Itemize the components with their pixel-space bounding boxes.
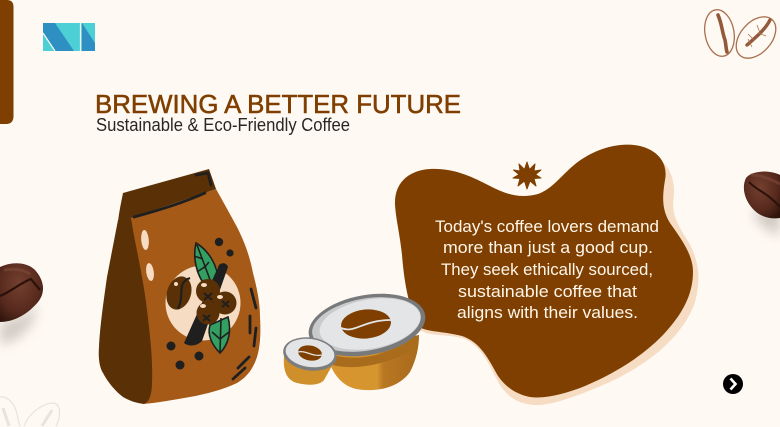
illustration: large coffee capsule bbox=[304, 285, 430, 390]
icon: next arrow button bbox=[723, 374, 743, 394]
icon: sketched coffee beans bbox=[701, 7, 780, 66]
leaves bbox=[194, 243, 230, 353]
bag dots bbox=[166, 238, 234, 370]
icon: coffee bean right bbox=[744, 172, 780, 236]
bag front bbox=[131, 189, 260, 404]
speech blob bbox=[395, 145, 693, 397]
small capsule bean bbox=[297, 344, 323, 362]
bag top fold bbox=[118, 169, 216, 222]
body text: aligns with their values. bbox=[457, 303, 638, 322]
subtitle: Sustainable & Eco-Friendly Coffee bbox=[96, 115, 350, 135]
icon: coffee bean left bbox=[0, 263, 43, 345]
bag highlights bbox=[140, 230, 155, 281]
capsule lid bbox=[304, 285, 430, 365]
capsule body bbox=[326, 335, 419, 390]
bag side bbox=[99, 218, 152, 404]
left tab bbox=[0, 0, 14, 124]
illustration: small coffee capsule bbox=[281, 334, 339, 385]
small capsule lid bbox=[281, 334, 339, 374]
bag coffee cherries bbox=[196, 279, 236, 324]
small capsule body bbox=[284, 356, 333, 385]
cinnamon stick bbox=[184, 263, 228, 345]
speech blob shadow bbox=[399, 149, 698, 405]
body text: more than just a good cup. bbox=[443, 238, 653, 257]
body text: sustainable coffee that bbox=[458, 282, 637, 301]
bag stitching bbox=[134, 173, 256, 379]
title: BREWING A BETTER FUTURE bbox=[95, 89, 461, 119]
capsule rim band bbox=[326, 335, 419, 367]
body text: Today's coffee lovers demand bbox=[435, 217, 659, 236]
bag coffee bean bbox=[162, 273, 196, 313]
icon: faint sketched beans bbox=[0, 397, 60, 426]
body text bbox=[435, 217, 659, 322]
body text: They seek ethically sourced, bbox=[441, 260, 653, 279]
capsule bean bbox=[340, 307, 392, 341]
bag label circle bbox=[166, 266, 240, 340]
icon: star flower bbox=[513, 162, 541, 189]
logo bbox=[43, 23, 95, 51]
illustration: coffee bag bbox=[99, 169, 260, 404]
